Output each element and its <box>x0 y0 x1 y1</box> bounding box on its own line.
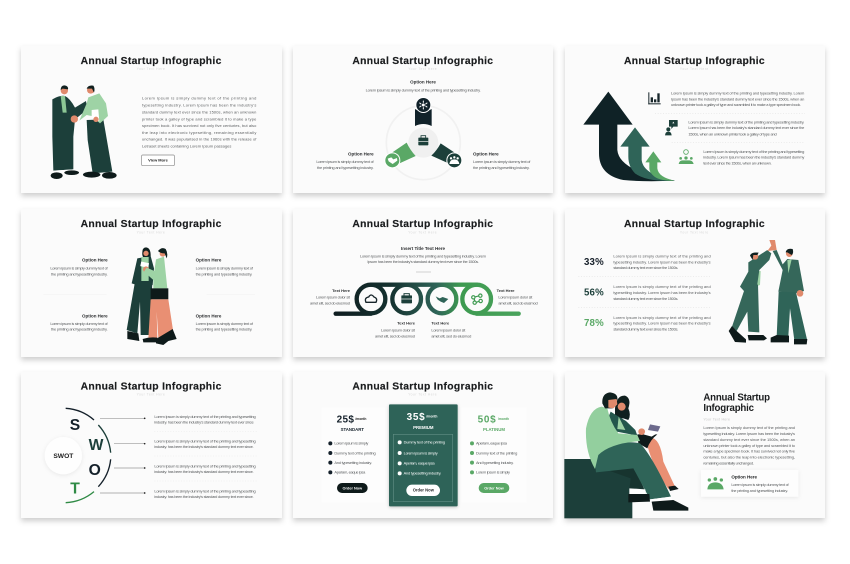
subtitle: Your Text Here <box>137 230 165 234</box>
option top left: Lorem ipsum is simply dummy text of <box>50 265 109 270</box>
heading and description <box>360 246 487 272</box>
plan: premium: 35$ <box>407 412 425 423</box>
text block: Lorem Ipsum is simply dummy text of the printing and <box>703 425 795 430</box>
icon: briefcase <box>418 136 428 145</box>
callout: option: Lorem ipsum is simply dummy text of <box>731 482 790 487</box>
plan: premium: Lorem ipsum is simply <box>404 451 438 455</box>
label 1: amet elit, sed do eiusmod <box>310 301 350 306</box>
text block: unchanged. It was popularised in the 1960s with the release of <box>142 137 257 142</box>
text item 3: industry. Lorem Ipsum has been the industry's standard dummy <box>703 155 804 160</box>
text block: unknown printer took a galley of type and scrambled it to <box>703 443 796 448</box>
plan: standard <box>322 408 385 502</box>
stat 78% <box>584 315 711 331</box>
stat 56% <box>584 284 711 301</box>
label 2 <box>375 320 416 339</box>
panel: SWOT <box>21 372 282 518</box>
SWOT text rows: industry. has been the industry's standard dummy text ever since. <box>154 444 254 449</box>
title: Annual Startup Infographic <box>81 382 222 393</box>
text block: specimen book. It has survived not only five centuries, but also <box>142 123 257 128</box>
plan: standard: 25$ <box>337 414 354 425</box>
subtitle: Your Text Here <box>680 67 709 71</box>
title: Annual Startup Infographic <box>352 56 493 67</box>
icon: gear <box>420 101 427 109</box>
top option text <box>366 80 481 92</box>
panel: process loops <box>293 209 553 357</box>
SWOT text rows: Lorem Ipsum is simply dummy text of the printing and typesetting <box>154 463 256 468</box>
option bottom left <box>50 313 109 332</box>
text item 3 <box>703 149 804 165</box>
plan: platinum: And typesetting industry. <box>476 460 514 465</box>
heading: Annual Startup <box>703 393 770 404</box>
icon: handshake <box>436 296 448 303</box>
option bottom left: Lorem ipsum is simply dummy text of <box>50 321 109 326</box>
SWOT diagram: SWOT <box>53 453 73 460</box>
option bottom right: Option Here <box>196 313 222 318</box>
subtitle: Your Text Here <box>137 392 165 396</box>
text item 1: Ipsum has been the industry's standard dummy text ever since the 1500s, when an <box>671 96 804 101</box>
text block: Letraset sheets containing Lorem Ipsum passages <box>142 144 231 149</box>
panel: couple with tablet <box>564 372 825 518</box>
button: view more: View More <box>148 158 169 163</box>
title: Annual Startup Infographic <box>352 382 493 393</box>
left option text <box>316 151 375 170</box>
label 1 <box>310 288 351 306</box>
illustration: two men high five <box>729 240 807 344</box>
text item 1: Lorem Ipsum is simply dummy text of the printing and typesetting industry. Lorem <box>671 90 805 95</box>
label 2: Text Here <box>397 320 416 325</box>
plan: platinum <box>462 408 527 502</box>
label 1: Text Here <box>332 288 351 293</box>
plan: platinum: Dummy text of the printing <box>476 450 517 455</box>
plan: premium <box>389 404 458 506</box>
SWOT text rows: industry. has been the industry's standard dummy text ever since <box>154 420 254 425</box>
stat 78%: Lorem Ipsum is simply dummy text of the printing and <box>613 315 711 320</box>
label 2: amet elit, sed do eiusmod <box>375 334 415 339</box>
right option text <box>473 151 531 170</box>
label 2: Lorem ipsum dolor sit <box>381 328 416 333</box>
connector arrows <box>100 417 145 494</box>
SWOT diagram: W <box>89 437 104 454</box>
arrows chart <box>583 92 675 181</box>
text item 1: unknown printer took a galley of type and scrambled it to make a type specimen book. <box>671 102 801 107</box>
plan: platinum: Order Now <box>484 486 504 490</box>
callout: option: Option Here <box>731 474 758 479</box>
text block: Lorem Ipsum is simply dummy text of the printing and <box>142 95 256 100</box>
button: view more <box>142 155 174 166</box>
plan: standard: Aperiam, eaque ipsa <box>334 470 366 475</box>
heading and description: Lorem Ipsum is simply dummy text of the printing and typesetting industry. Lorem <box>360 253 487 258</box>
text item 2: Lorem Ipsum is simply dummy text of the printing and typesetting industry. <box>688 119 804 124</box>
option bottom right: Lorem ipsum is simply dummy text of <box>196 321 254 326</box>
icon: team <box>707 477 724 489</box>
label 4: amet elit, sed do eiusmod <box>498 301 538 306</box>
icon: group with location pin <box>679 150 694 164</box>
heading <box>703 393 770 414</box>
title: Annual Startup Infographic <box>624 219 765 230</box>
text item 2 <box>688 119 805 136</box>
option top right <box>196 258 254 276</box>
label 3: Text Here <box>431 320 450 325</box>
option bottom right: the printing and typesetting industry. <box>196 327 252 332</box>
title: Annual Startup Infographic <box>81 219 222 230</box>
title: Annual Startup Infographic <box>624 56 765 67</box>
plan: platinum: /month <box>498 417 509 421</box>
plan: standard: /month <box>355 417 366 421</box>
subtitle: Your Text Here <box>680 230 709 234</box>
title: Annual Startup Infographic <box>81 56 222 67</box>
stat 33%: 33% <box>584 257 604 268</box>
plan: premium: Dummy text of the printing <box>404 441 445 445</box>
SWOT diagram <box>45 408 111 503</box>
text item 3: Lorem Ipsum is simply dummy text of the printing and typesetting <box>703 149 804 154</box>
callout: option: the printing and typesetting industry. <box>731 488 788 493</box>
plan: platinum: Aperiam, eaque ipsa <box>476 441 508 446</box>
cycle diagram <box>384 97 462 180</box>
plan: platinum: Lorem ipsum is simply <box>476 470 510 475</box>
text block: make a type specimen book. It has survived not only five <box>703 449 796 454</box>
text block <box>703 425 796 466</box>
stat 78%: 78% <box>584 318 604 329</box>
panel: handshake slide <box>21 46 282 193</box>
SWOT text rows <box>154 414 256 499</box>
option top right: Lorem ipsum is simply dummy text of <box>196 265 254 270</box>
text item 1 <box>671 90 805 107</box>
option top right: the printing and typesetting industry. <box>196 271 252 276</box>
plan: standard: STANDART <box>341 427 364 432</box>
stat 56%: standard dummy text ever since the 1500s. <box>613 296 678 301</box>
option top left <box>50 258 109 276</box>
plan: premium: /month <box>426 415 437 419</box>
right option text: the printing and typesetting industry. <box>473 165 530 170</box>
option bottom left: Option Here <box>82 313 108 318</box>
label 4: Text Here <box>497 288 515 293</box>
label 3: amet elit, sed do eiusmod <box>431 334 471 339</box>
plan: premium: Order Now <box>413 488 435 493</box>
heading and description: Ipsum has been the industry's standard dummy text ever since the 1500s. <box>367 259 479 264</box>
illustration: two women talking <box>127 247 177 345</box>
left option text: the printing and typesetting industry. <box>317 165 374 170</box>
stat 33% <box>584 254 711 270</box>
heading and description: Insert Title Text Here <box>401 246 445 251</box>
SWOT diagram: O <box>89 462 101 479</box>
plan: premium: And typesetting industry. <box>404 472 441 476</box>
plan: premium: PREMIUM <box>413 425 434 430</box>
icon: nodes <box>472 294 482 304</box>
illustration: two men shaking hands <box>51 85 117 179</box>
text block: standard dummy text ever since the 1500s, when an <box>703 437 795 442</box>
text block: centuries, but also the leap into electronic typesetting, <box>703 455 795 460</box>
stat 56%: 56% <box>584 287 604 298</box>
plan: platinum: 50$ <box>478 414 496 425</box>
option bottom right <box>196 313 254 332</box>
SWOT diagram: S <box>70 417 80 434</box>
text block: printer took a galley of type and scrambled it to make a type <box>142 116 257 121</box>
text block: the leap into electronic typesetting, remaining essentially <box>142 130 256 135</box>
heading: Infographic <box>703 403 755 414</box>
plan: premium: Aperiam, eaque ipsa <box>404 462 436 466</box>
panel: three options cycle <box>293 46 553 193</box>
icon: briefcase <box>401 294 412 303</box>
label 3: Lorem ipsum dolor sit <box>431 328 466 333</box>
top option text: Lorem ipsum is simply dummy text of the printing and typesetting industry. <box>366 87 481 92</box>
illustration: couple sitting on block <box>564 392 688 518</box>
label 4 <box>497 288 538 306</box>
option bottom left: the printing and typesetting industry. <box>51 327 108 332</box>
stat 78%: standard dummy text ever since the 1500s. <box>613 326 678 331</box>
text item 3: text ever since the 1500s, when an unknown. <box>703 160 772 165</box>
option top left: the printing and typesetting industry. <box>51 271 108 276</box>
icon: person with speech bubble <box>665 120 678 135</box>
plan: platinum: PLATINUM <box>483 427 505 432</box>
text block: typesetting industry. Lorem Ipsum has been the industry's <box>703 431 795 436</box>
label 4: Lorem ipsum dolor sit <box>498 295 533 300</box>
text block: typesetting industry. Lorem Ipsum has been the industry's <box>142 102 256 107</box>
SWOT diagram: T <box>70 480 80 497</box>
SWOT text rows: Lorem Ipsum is simply dummy text of the printing and typesetting <box>154 439 256 444</box>
icon: handshake <box>388 157 397 164</box>
plan: standard: Order Now <box>343 486 362 490</box>
option top right: Option Here <box>196 258 222 263</box>
plan: standard: Dummy text of the printing <box>334 450 376 455</box>
right option text: Option Here <box>473 151 499 156</box>
plan: standard: And typesetting industry. <box>334 460 372 465</box>
subtitle: Your Text Here <box>408 230 437 234</box>
icon: team <box>449 156 459 164</box>
text block <box>142 95 257 149</box>
subtitle: Your Text Here <box>137 67 165 71</box>
label 1: Lorem ipsum dolor sit <box>316 295 351 300</box>
icon: bar chart <box>648 92 661 104</box>
SWOT text rows: industry. has been the industry's standard dummy text ever since. <box>154 494 254 499</box>
text block: remaining essentially unchanged. <box>703 461 754 466</box>
subtitle: Your Text Here <box>408 392 437 396</box>
top option text: Option Here <box>410 80 436 85</box>
stat 56%: typesetting industry. Lorem Ipsum has been the industry's <box>613 290 711 295</box>
SWOT text rows: Lorem Ipsum is simply dummy text of the printing and typesetting <box>154 488 256 493</box>
panel: growth arrows <box>565 46 825 193</box>
loop diagram <box>336 285 519 314</box>
icon: cloud network <box>365 295 377 302</box>
SWOT text rows: industry. has been the industry's standard dummy text ever since. <box>154 469 254 474</box>
right option text: Lorem ipsum is simply dummy text of <box>473 159 531 164</box>
stat 56%: Lorem Ipsum is simply dummy text of the printing and <box>613 284 711 289</box>
title: Annual Startup Infographic <box>352 219 493 230</box>
left option text: Option Here <box>348 151 374 156</box>
option top left: Option Here <box>82 258 108 263</box>
SWOT text rows: Lorem Ipsum is simply dummy text of the printing and typesetting <box>154 414 256 419</box>
panel: two women <box>21 209 282 357</box>
text item 2: 1500s, when an unknown printer took a galley of type and <box>688 131 777 136</box>
label 3 <box>431 320 471 339</box>
text item 2: Lorem Ipsum has been the industry's standard dummy text ever since the <box>688 125 805 130</box>
callout: option <box>701 470 798 497</box>
left option text: Lorem ipsum is simply dummy text of <box>316 159 375 164</box>
subtitle: Your Text Here <box>408 67 437 71</box>
stat 78%: typesetting industry. Lorem Ipsum has been the industry's <box>613 321 711 326</box>
text block: standard dummy text ever since the 1500s, when an unknown <box>142 109 256 114</box>
subtitle: Your Text Here <box>703 417 730 421</box>
panel: pricing <box>293 372 553 518</box>
stat 33%: standard dummy text ever since the 1500s. <box>613 265 678 270</box>
stat 33%: typesetting industry. Lorem Ipsum has been the industry's <box>613 259 711 264</box>
panel: percentages and high five <box>565 209 825 357</box>
stat 33%: Lorem Ipsum is simply dummy text of the printing and <box>613 254 711 259</box>
plan: standard: Lorem ipsum is simply <box>334 441 368 446</box>
